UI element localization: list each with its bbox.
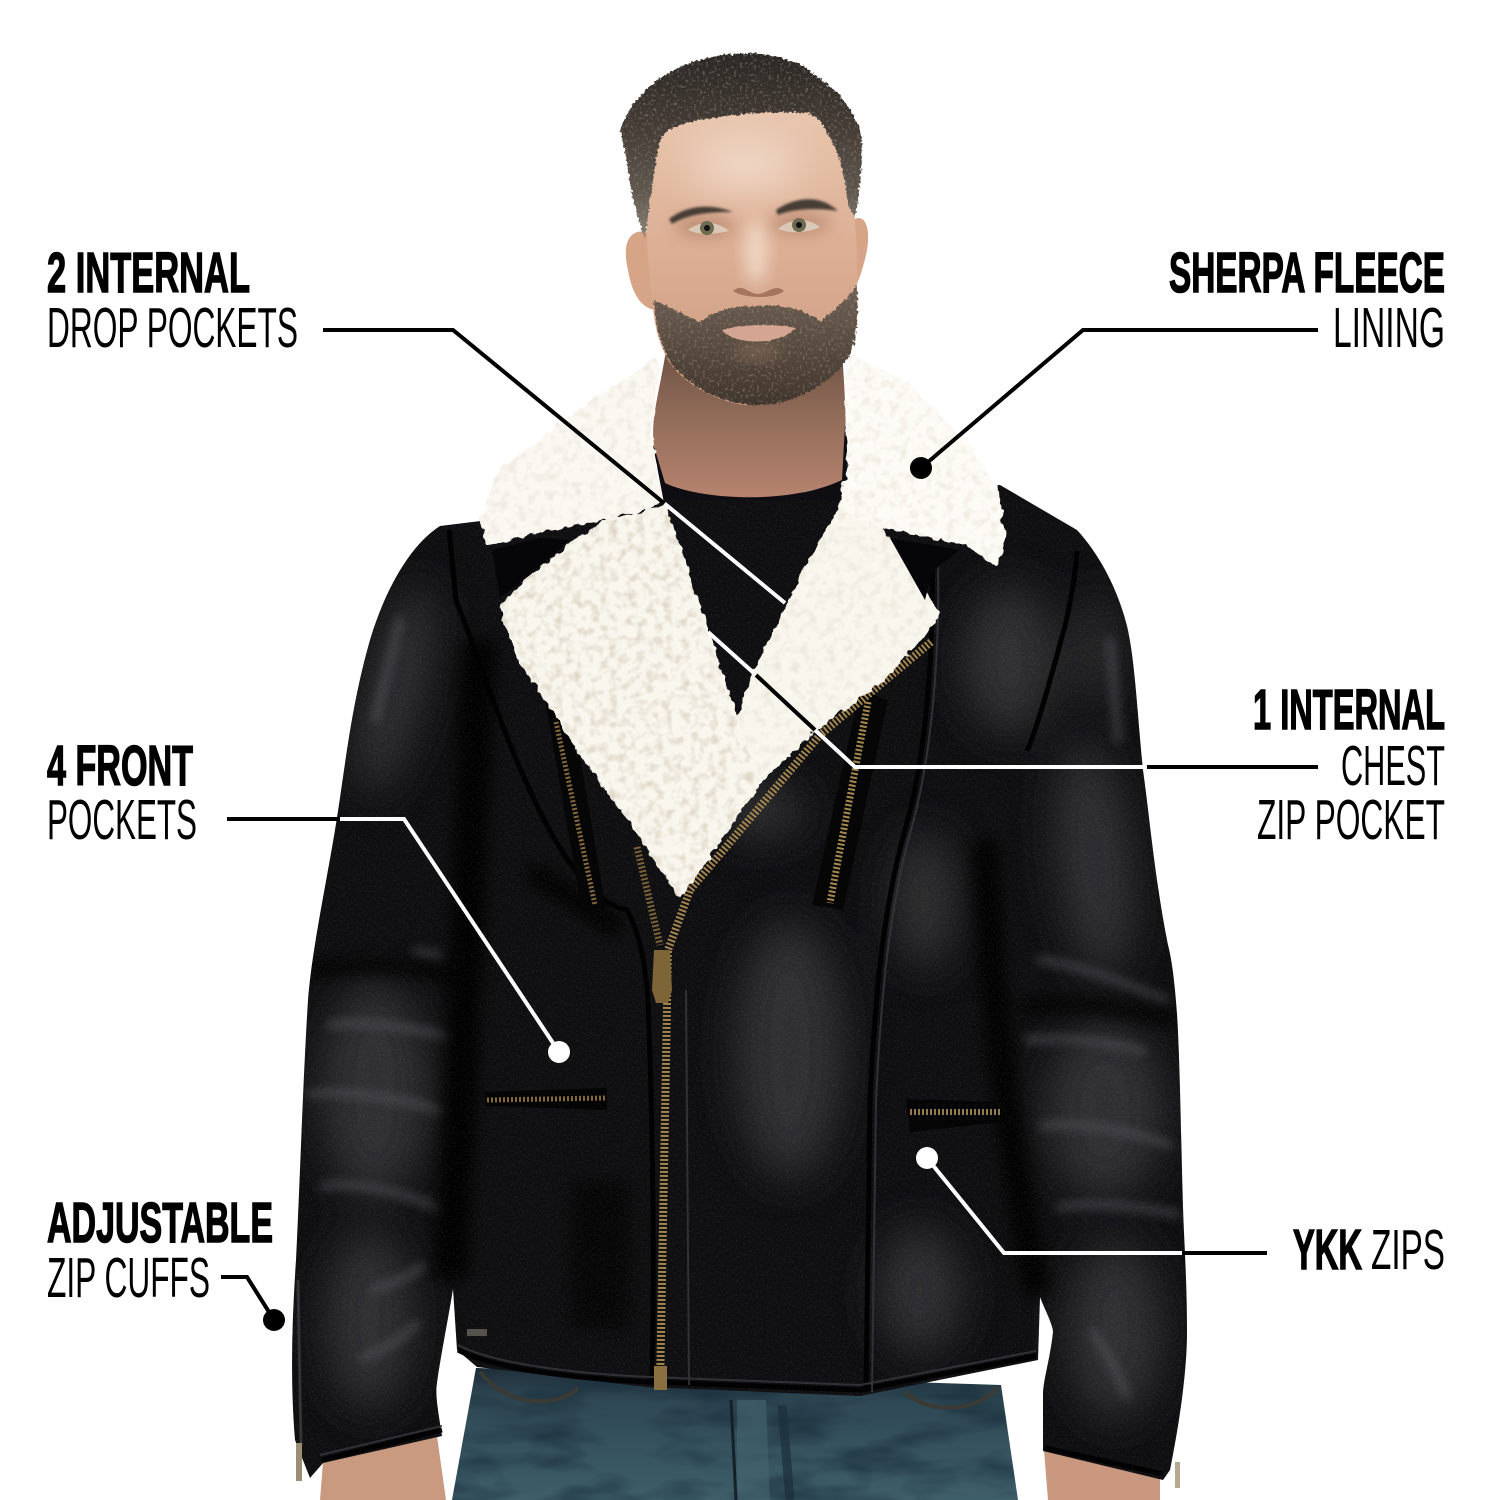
callout: ykk zips (916, 1147, 1445, 1282)
chin patch (733, 345, 781, 359)
dot (548, 1041, 570, 1063)
zip end stop (654, 1366, 667, 1390)
subheading: POCKETS (47, 788, 197, 852)
ears (626, 218, 868, 310)
right eye (778, 218, 820, 232)
subheading: ZIP CUFFS (47, 1246, 210, 1310)
left eyebrow (669, 207, 733, 224)
head (620, 53, 868, 405)
jacket (280, 480, 1200, 1490)
beard (654, 285, 857, 405)
left eye (688, 221, 729, 235)
t-shirt collar rib (668, 510, 832, 524)
left lapel (500, 504, 761, 898)
hair (620, 53, 862, 238)
t-shirt (652, 425, 860, 720)
leader line (323, 330, 785, 603)
forehead highlight (690, 143, 800, 187)
right chest zip pocket (812, 690, 888, 910)
heading: ADJUSTABLE (47, 1191, 273, 1255)
leather grain (280, 480, 1200, 1490)
leader line (927, 1158, 1267, 1253)
heading: YKK (1293, 1218, 1362, 1282)
subheading: DROP POCKETS (47, 296, 298, 360)
jeans (452, 1368, 1018, 1500)
leader line (227, 819, 559, 1052)
mouth (722, 325, 795, 341)
man wearing jacket (280, 53, 1200, 1500)
right eyebrow (776, 199, 838, 215)
dot (910, 457, 932, 479)
collar shadow under right (890, 538, 960, 600)
right collar (838, 355, 1005, 566)
right lapel (640, 507, 940, 896)
dot (916, 1147, 938, 1169)
brand plate (467, 1329, 487, 1336)
zip puller (652, 950, 672, 1003)
left collar (479, 357, 666, 545)
right hand (1044, 1450, 1160, 1500)
callout: sherpa fleece lining (910, 241, 1445, 479)
collar shadow under left (492, 538, 570, 598)
left pocket zip (485, 1088, 607, 1110)
lit seams (320, 560, 1036, 1455)
nose highlight (745, 220, 767, 284)
jacket shell (292, 485, 1187, 1480)
left hand (320, 1436, 446, 1500)
leader line (921, 330, 1318, 468)
heading: 2 INTERNAL (47, 241, 250, 305)
leather highlights (280, 480, 1200, 1490)
neck (653, 350, 846, 505)
subheading: ZIPS (1371, 1218, 1445, 1282)
face (646, 105, 857, 405)
callout: 2 internal drop pockets (47, 241, 785, 603)
leader line (221, 1277, 274, 1320)
right pocket zip (906, 1099, 1003, 1132)
callout: 4 front pockets (47, 734, 570, 1063)
sherpa collar (479, 355, 1005, 600)
main front zip (637, 642, 931, 1388)
nose shadow (733, 288, 784, 297)
eye shadow (675, 212, 830, 237)
left chest zip pocket (545, 700, 606, 910)
left zip pull (296, 1443, 302, 1481)
right zip pull (1175, 1462, 1180, 1488)
left cuff zip (298, 1280, 301, 1445)
dot (263, 1309, 285, 1331)
sherpa lapels (500, 504, 940, 898)
seams (322, 530, 1163, 1474)
leader line (708, 632, 1318, 767)
callout: 1 internal chest zip pocket (708, 632, 1445, 852)
callout: adjustable zip cuffs (47, 1191, 285, 1331)
heading: 4 FRONT (47, 734, 193, 798)
